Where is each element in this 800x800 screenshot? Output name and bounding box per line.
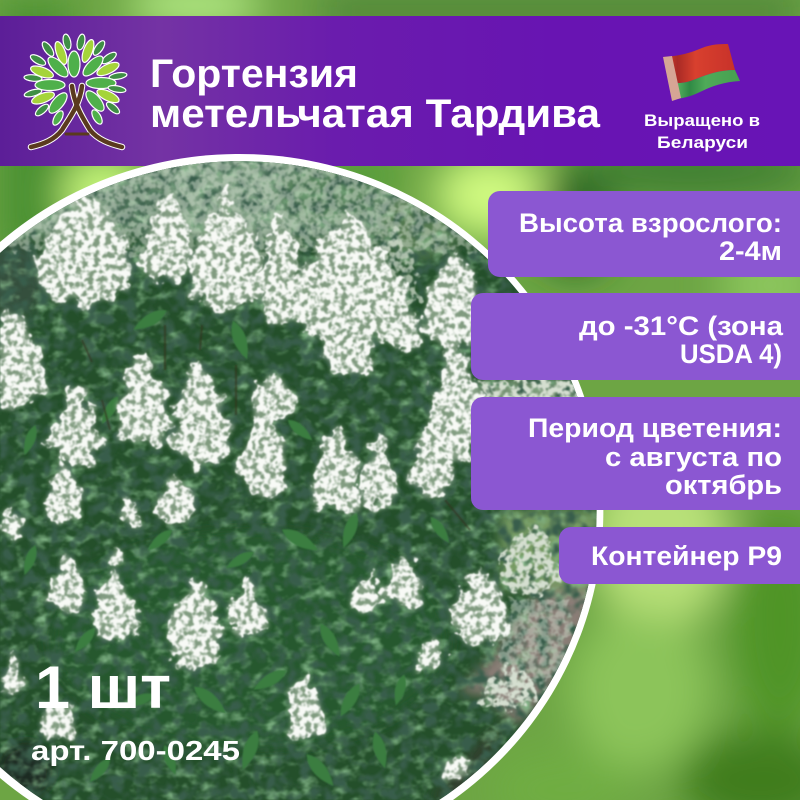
- info box: height: Высота взрослого:: [519, 208, 782, 238]
- made in Belarus caption: Выращено в: [644, 111, 760, 130]
- info box: flowering period: Период цветения:: [528, 413, 782, 443]
- made in Belarus caption: [644, 111, 760, 152]
- title: Гортензия: [150, 52, 358, 96]
- tree leaves: [23, 33, 127, 127]
- title: метельчатая Тардива: [150, 92, 601, 136]
- info box: flowering period: [471, 397, 800, 510]
- info box: hardiness: [471, 293, 800, 380]
- info box: height: [488, 191, 800, 277]
- photo: flowering hydrangea shrub in white circle: [0, 150, 620, 800]
- flag of Belarus: [663, 44, 740, 101]
- info box: flowering period: октябрь: [665, 470, 782, 500]
- info box: container: Контейнер Р9: [591, 541, 782, 571]
- made in Belarus caption: Беларуси: [657, 133, 748, 152]
- info box: container: [559, 527, 800, 584]
- flower panicles: white blossoms: [0, 190, 506, 778]
- pale lawn blossom areas: [0, 160, 610, 706]
- article number: арт. 700-0245: [31, 735, 240, 766]
- flower panicles: grey-green haze: [0, 190, 506, 778]
- stems: [82, 325, 470, 530]
- info box: height: 2-4м: [719, 236, 782, 266]
- info box: hardiness: до -31°С (зона: [579, 311, 784, 341]
- info box: hardiness: USDA 4): [680, 339, 782, 369]
- quantity: 1 шт: [35, 654, 171, 721]
- top purple banner: [0, 16, 800, 166]
- logo: tree: [23, 33, 127, 147]
- title: [150, 52, 601, 136]
- info box: flowering period: с августа по: [605, 442, 782, 472]
- sample leaves: [20, 305, 453, 790]
- tree trunk: [31, 86, 122, 147]
